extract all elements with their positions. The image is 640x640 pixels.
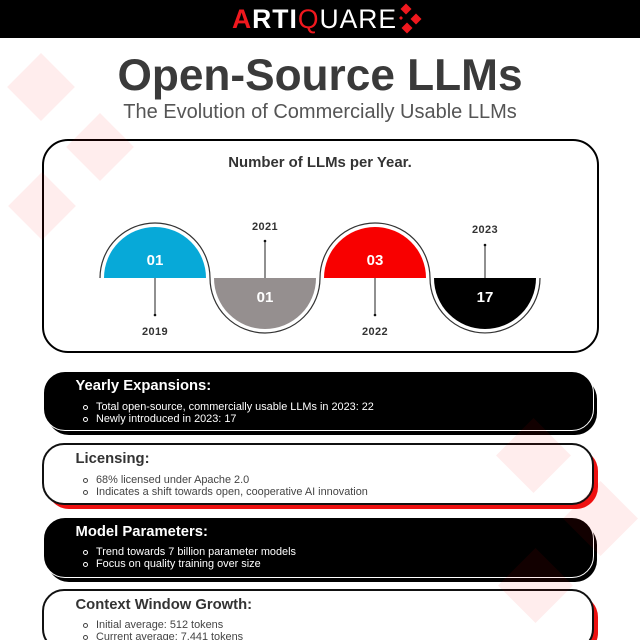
title: Open-Source LLMs [117,51,523,100]
bullet list: Indicates a shift towards open, cooperative AI innovation [96,486,368,498]
segment 2022: 03 [367,252,383,269]
bullet list [83,401,374,425]
segment 2021: 2021 [252,221,278,233]
segment 2019: 2019 [142,326,168,338]
bullet list: Initial average: 512 tokens [96,619,223,631]
logo wordmark: ARTIQUARE [232,4,397,34]
bullet list: 68% licensed under Apache 2.0 [96,474,249,486]
bullet list: Trend towards 7 billion parameter models [96,546,296,558]
segment 2021: 01 [257,289,273,306]
segment 2021 [214,221,316,329]
segment 2023: 2023 [472,224,498,236]
segment 2023 [434,224,536,329]
bullet list: Total open-source, commercially usable LLMs in 2023: 22 [96,401,374,413]
chart heading: Number of LLMs per Year. [228,155,412,171]
segment 2022 [324,227,426,338]
logo icon: red diamonds [399,4,422,34]
bullet list: Focus on quality training over size [96,558,261,570]
segment 2023: 17 [477,289,493,306]
bullet list [83,546,296,570]
segment 2019 [104,227,206,338]
heading: Yearly Expansions: [76,378,211,394]
heading: Context Window Growth: [76,597,252,613]
panel: number of LLMs per year [42,139,599,353]
segment 2019: 01 [147,252,163,269]
bullet list [83,474,368,498]
subtitle: The Evolution of Commercially Usable LLMs [123,101,517,123]
segment 2022: 2022 [362,326,388,338]
heading: Model Parameters: [76,524,208,540]
heading: Licensing: [76,451,150,467]
bullet list [83,619,243,640]
bullet list: Newly introduced in 2023: 17 [96,413,236,425]
header bar with logo [0,0,640,38]
